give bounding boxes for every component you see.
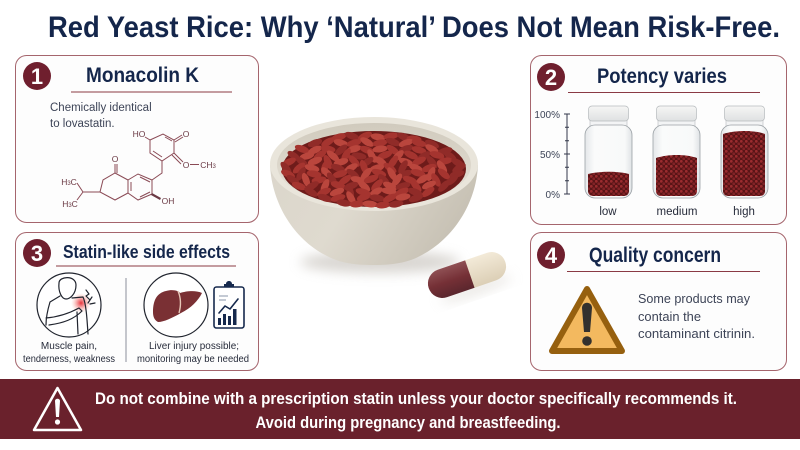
axis: percent scale: [534, 110, 570, 201]
badge 1: [23, 62, 51, 90]
molecule diagram: HO: [133, 129, 146, 139]
molecule diagram: O: [183, 160, 190, 170]
icon: liver: [144, 273, 208, 337]
molecule diagram: OH: [162, 196, 174, 206]
description: Some products may: [638, 292, 751, 306]
caption: tenderness: tenderness, weakness: [23, 354, 115, 365]
caption: monitoring: monitoring may be needed: [137, 354, 249, 365]
description line 2: contain the: [638, 310, 701, 324]
heading: Monacolin K: Monacolin K: [86, 64, 199, 87]
axis: percent scale: 100%: [534, 110, 560, 121]
illustration: bowl of red yeast rice: [270, 117, 478, 273]
description line 3: contaminant citrinin.: [638, 327, 755, 341]
icon: capsule: [424, 248, 514, 308]
axis: percent scale: 50%: [540, 150, 560, 161]
warning line 1: Do not combine with a prescription statin unless your doctor specifically recommends it.: [95, 389, 737, 408]
warning line 2: Avoid during pregnancy and breastfeeding.: [256, 413, 560, 432]
description line 2: to lovastatin.: [50, 118, 115, 130]
panel: Quality concern: [530, 232, 786, 370]
badge 4: [537, 241, 565, 269]
jar: high: [721, 106, 768, 198]
caption: liver injury: Liver injury possible;: [149, 341, 239, 352]
heading: quality concern: Quality concern: [589, 244, 721, 267]
panel: Statin-like side effects: [16, 232, 258, 370]
icon: clipboard with chart: [214, 281, 244, 328]
jar: low: [585, 106, 632, 198]
jar label: low: low: [599, 206, 617, 218]
warning banner: [0, 379, 800, 439]
icon: warning triangle: [552, 289, 622, 351]
molecule diagram: CH3: [200, 160, 216, 170]
heading: statin-like side effects: Statin-like side effects: [63, 242, 230, 262]
badge 2: [537, 63, 565, 91]
molecule diagram: H3C: [62, 199, 78, 209]
badge 3: [23, 239, 51, 267]
molecule diagram: [61, 129, 216, 209]
jar label: high: high: [733, 206, 755, 218]
description line 1: Chemically identical: [50, 102, 152, 114]
icon: muscle pain person: [37, 273, 101, 337]
molecule diagram: O: [112, 154, 119, 164]
molecule diagram: O: [183, 129, 190, 139]
badge 1: 1: [31, 64, 43, 89]
axis: percent scale: 0%: [546, 190, 560, 201]
caption: muscle pain: Muscle pain,: [41, 341, 97, 352]
badge 4: 4: [545, 243, 558, 268]
jar label: medium: medium: [657, 206, 697, 218]
badge 3: 3: [31, 241, 43, 266]
rice grains: [279, 130, 467, 209]
badge 2: 2: [545, 65, 557, 90]
heading: potency varies: Potency varies: [597, 65, 727, 88]
panel: Potency varies: [530, 56, 786, 224]
molecule diagram: H3C: [61, 177, 77, 187]
jar: medium: [653, 106, 700, 198]
icon: banner warning: [34, 388, 81, 430]
panel: Monacolin K: [16, 56, 258, 222]
